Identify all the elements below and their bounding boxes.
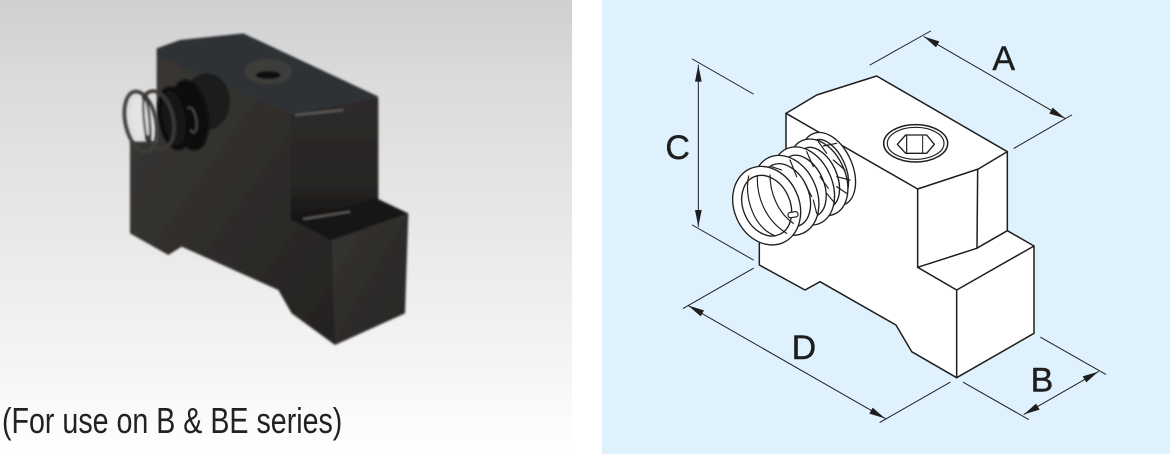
dimension B: B — [1031, 362, 1053, 400]
dimension C — [665, 59, 753, 260]
dimension B — [963, 337, 1106, 419]
icon: coil spring — [726, 129, 862, 250]
icon: socket head screw — [884, 125, 948, 162]
photo: black stopper block with spring — [130, 33, 408, 345]
icon: photo spring coils — [119, 81, 209, 155]
dimension A: A — [992, 40, 1015, 78]
panel: product photo — [0, 0, 572, 454]
panel: dimension diagram — [602, 0, 1170, 454]
dimension C: C — [665, 129, 690, 167]
dimension A — [870, 31, 1072, 148]
dimension D — [683, 268, 950, 422]
dimension D: D — [792, 329, 816, 367]
block drawing — [759, 76, 1034, 378]
caption: (For use on B & BE series) — [2, 401, 342, 441]
